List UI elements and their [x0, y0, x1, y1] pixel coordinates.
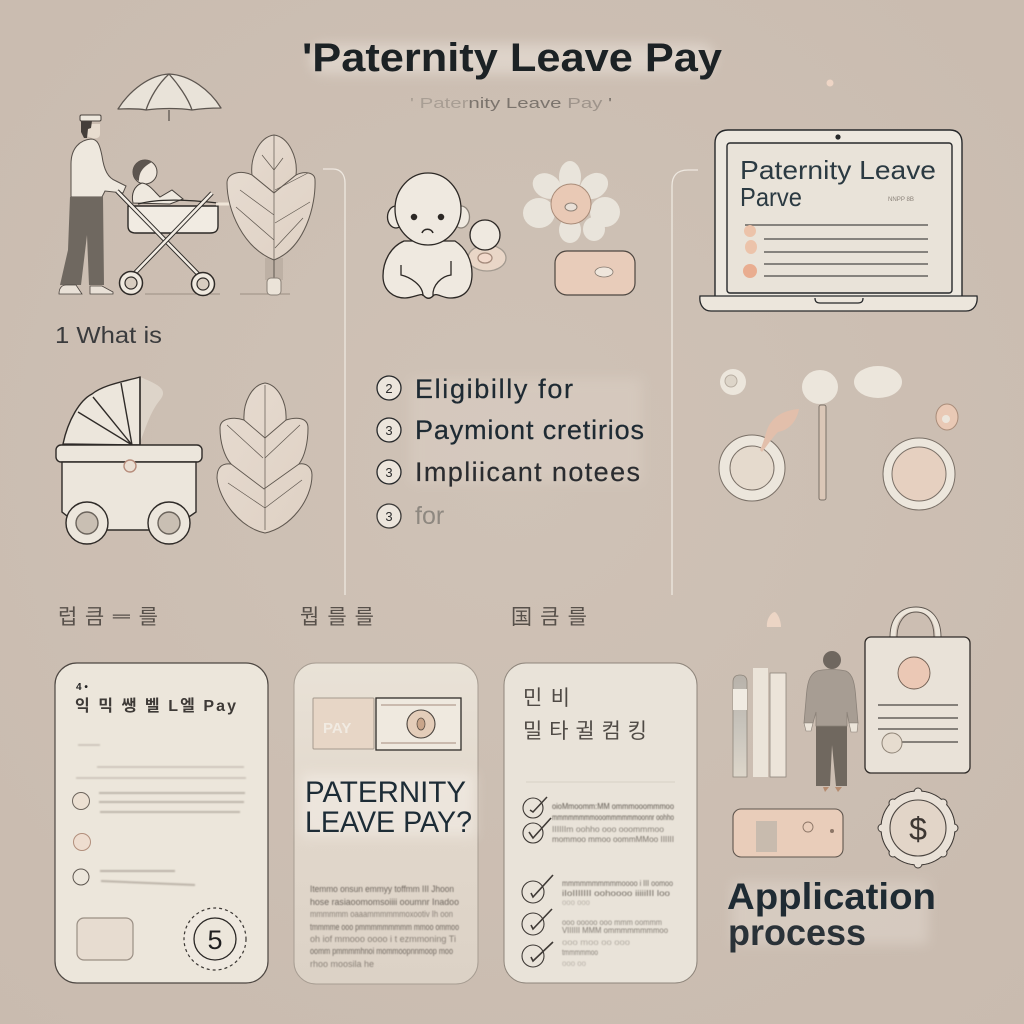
panel: card 1: [55, 663, 268, 983]
panel: card 3: [504, 663, 697, 983]
checklist text: IIIIIIm oohho ooo ooommmoo: [552, 824, 664, 834]
checklist text: mmmmmmmmmmoooo i III oomoo: [562, 878, 673, 888]
card 2 body text: mmmmmm oaaammmmmmoxootiv Ih oon: [310, 909, 453, 919]
icon: pram: [56, 377, 202, 544]
checklist text: tmmmmmoo: [562, 947, 598, 957]
card 1 box: [77, 918, 133, 960]
checklist text: ooo oo: [562, 958, 586, 968]
card 1 row 2: [74, 834, 245, 850]
card 3 heading: 밀 타 귈 컴 킹: [523, 720, 647, 743]
icon: dollar coin: $: [909, 811, 927, 847]
item 4: for: [415, 502, 444, 530]
card 2 body text: oomm pmmmmhnoi mommoopnnmoop moo: [310, 946, 453, 956]
checklist text: VIIIIII MMM ommmmmmmmoo: [562, 925, 668, 935]
badge: 5: 5: [207, 925, 223, 955]
icon: plant leaf: [227, 135, 315, 295]
heading: korean label 1: 럽 큼 ᆖ 를: [58, 606, 158, 629]
card 1 rules: [76, 745, 246, 778]
checklist text: iIoIIIIIII oohoooo iiiiiIII loo: [562, 888, 670, 898]
heading: application process: process: [728, 912, 866, 953]
check 1: [523, 797, 547, 818]
divider right: [672, 170, 698, 595]
icon group: coins and spoon: [719, 366, 958, 510]
checklist text: oioMmoomm:MM ommmooommmoo: [552, 801, 674, 811]
card 3 heading: [523, 687, 647, 743]
check 4: [522, 909, 552, 935]
father: [59, 115, 126, 294]
heading: korean label 3: 国 큼 를: [511, 606, 587, 629]
checklist text: mommoo mmoo oommMMoo IIIIII: [552, 834, 674, 844]
banknote: [313, 698, 461, 750]
laptop heading: Paternity Leave: [740, 155, 936, 185]
item 1: 2: [385, 381, 393, 396]
card 2 body text: [310, 884, 459, 969]
card 2 heading: LEAVE PAY?: [305, 806, 472, 839]
icon: application document: [865, 607, 970, 773]
card 1 row 1: [72, 792, 245, 812]
banknote: PAY: [323, 720, 351, 737]
label: what is: 1 What is: [55, 322, 162, 348]
small peach mark: [767, 612, 781, 627]
icon: dollar coin: [878, 788, 958, 868]
laptop bullets: [743, 225, 757, 278]
card 2 body text: tmmmme ooo pmmmmmmmmm mmoo ommoo: [310, 922, 459, 932]
icon: leaf: [217, 383, 312, 533]
card 2 body text: oh iof mmooo oooo i t ezmmoning Ti: [310, 934, 456, 944]
icon: books: [733, 668, 786, 777]
list: topics: [377, 374, 644, 530]
icon: umbrella: [118, 74, 221, 121]
checklist: [522, 797, 553, 967]
item 2: Paymiont cretirios: [415, 415, 644, 445]
icon: baby: [383, 173, 506, 298]
card 3 heading: 민비: [523, 687, 570, 710]
checklist text: ooo ooooo ooo mmm oommm: [562, 917, 662, 927]
item 1: Eligibilly for: [415, 374, 573, 404]
baby in stroller: [132, 160, 183, 204]
card 2 heading: [302, 774, 474, 839]
check 5: [522, 942, 553, 967]
heading: application process: [727, 876, 936, 953]
item 3: 3: [385, 465, 393, 480]
stroller frame: [117, 191, 290, 296]
card 2 body text: hose rasiaoomomsoiiii ooumnr Inadoo: [310, 897, 459, 907]
laptop lines: [745, 225, 928, 276]
subtitle: ' Pater nity Leave Pay ': [410, 95, 612, 112]
decorative dot: [826, 80, 834, 86]
icon: person: [804, 651, 858, 792]
card 1 title: 익 믹 쌩 벨 L엘 Pay: [75, 697, 236, 715]
item 2: 3: [385, 423, 393, 438]
checklist text: ooo ooo: [562, 897, 590, 907]
icon: peach ticket: [733, 809, 843, 857]
icon: flower: [523, 161, 620, 243]
badge: 5: [184, 908, 246, 970]
checklist text: mmmmmmmmooommmmmmoonnr oohho: [552, 812, 674, 822]
item 4: 3: [385, 509, 393, 524]
icon: father pushing stroller: [59, 115, 290, 296]
checklist text: [552, 801, 674, 968]
item 4: [377, 502, 444, 530]
card 1 row 3: [73, 869, 195, 885]
card 2 body text: rhoo moosila he: [310, 959, 374, 969]
title: 'Paternity Leave Pay: [302, 36, 723, 80]
check 2: [523, 818, 551, 843]
icon: peach card: [555, 251, 635, 295]
panel: card 2: [294, 663, 478, 984]
laptop subheading: Parve: [740, 182, 802, 212]
card 3 rule: [526, 781, 675, 783]
checklist text: ooo moo oo ooo: [562, 937, 630, 947]
check 3: [522, 875, 553, 903]
card 2 body text: Itemmo onsun emmyy toffmm III Jhoon: [310, 884, 454, 894]
card 2 heading: PATERNITY: [305, 776, 466, 809]
item 3: Impliicant notees: [415, 457, 640, 487]
heading: application process: Application: [727, 876, 936, 917]
card 1 marker: 4 •: [76, 682, 88, 693]
divider left: [323, 169, 345, 595]
laptop small text: NNPP 8B: [888, 197, 914, 203]
icon: laptop: [700, 130, 977, 311]
heading: korean label 2: 뭡 를 를: [300, 606, 374, 629]
